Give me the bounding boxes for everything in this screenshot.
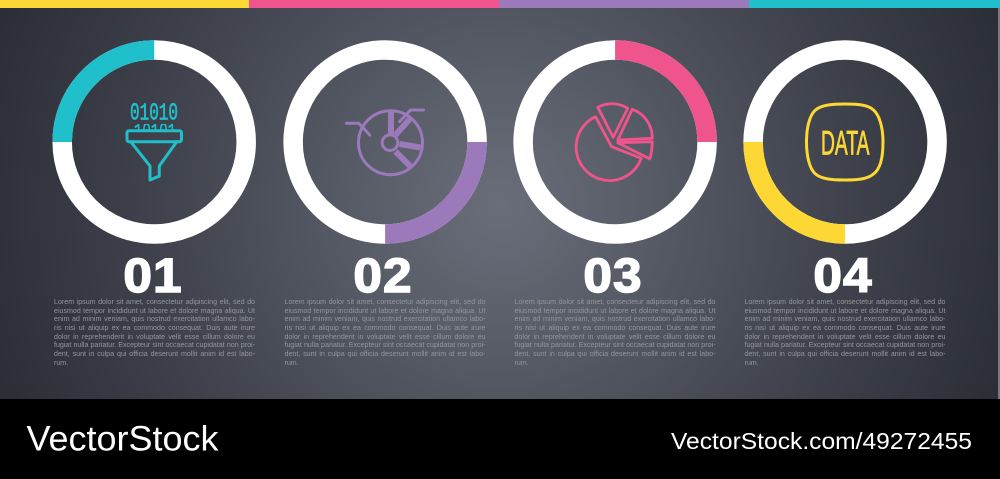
text block 04: rum. <box>744 359 759 367</box>
icon: binary data funnel <box>127 100 182 180</box>
ring: 03 progress <box>523 50 707 234</box>
text block 02: enim ad minim veniam, quis nostrud exercitation ullamco labo- <box>284 315 486 323</box>
text block 02: Lorem ipsum dolor sit amet, consectetur adipiscing elit, sed do <box>284 298 486 306</box>
text block 04: enim ad minim veniam, quis nostrud exercitation ullamco labo- <box>744 315 946 323</box>
text block 04: eiusmod tempor incididunt ut labore et dolore magna aliqua. Ut <box>744 307 946 315</box>
panel: step 04 <box>743 40 947 367</box>
text block 03 <box>514 298 716 367</box>
number 03: 03 <box>583 249 643 303</box>
ring: 04 progress <box>753 50 937 234</box>
footer band <box>0 399 1000 479</box>
icon: data badge: DATA <box>820 124 869 162</box>
icon: exploded pie chart <box>576 104 652 181</box>
text block 01: eiusmod tempor incididunt ut labore et dolore magna aliqua. Ut <box>54 307 255 315</box>
ring: 01 progress <box>62 50 246 234</box>
panel: step 01 <box>52 40 256 367</box>
text block 02: dent, sunt in culpa qui officia deserunt mollit anim id est labo- <box>284 350 486 358</box>
text block 03: ris nisi ut aliquip ex ea commodo consequat. Duis aute irure <box>514 324 716 332</box>
text block 02 <box>284 298 486 367</box>
text block 01 <box>54 298 255 367</box>
text block 01: enim ad minim veniam, quis nostrud exercitation ullamco labo- <box>54 315 255 323</box>
text block 03: Lorem ipsum dolor sit amet, consectetur adipiscing elit, sed do <box>514 298 716 306</box>
icon: data badge <box>806 104 882 180</box>
text block 01: Lorem ipsum dolor sit amet, consectetur adipiscing elit, sed do <box>54 298 255 306</box>
icon: disc with handles <box>346 110 423 175</box>
text block 02: ris nisi ut aliquip ex ea commodo consequat. Duis aute irure <box>284 324 486 332</box>
panel: step 02 <box>283 40 487 367</box>
text block 02: rum. <box>284 359 299 367</box>
text block 01: dent, sunt in culpa qui officia deserunt mollit anim id est labo- <box>54 350 255 358</box>
text block 03: dolor in reprehenderit in voluptate velit esse cillum dolore eu <box>514 333 716 341</box>
icon: binary data funnel: 10101 <box>134 120 176 147</box>
text block 03: fugiat nulla pariatur. Excepteur sint occaecat cupidatat non proi- <box>514 341 716 349</box>
panel: step 03 <box>513 40 717 367</box>
number 04: 04 <box>813 249 873 303</box>
text block 04: dent, sunt in culpa qui officia deserunt mollit anim id est labo- <box>744 350 946 358</box>
ring: 02 progress <box>293 50 477 234</box>
number 02: 02 <box>353 249 413 303</box>
text block 03: eiusmod tempor incididunt ut labore et dolore magna aliqua. Ut <box>514 307 716 315</box>
text block 04: ris nisi ut aliquip ex ea commodo consequat. Duis aute irure <box>744 324 946 332</box>
text block 04: fugiat nulla pariatur. Excepteur sint occaecat cupidatat non proi- <box>744 341 946 349</box>
footer image id: VectorStock.com/49272455 <box>671 428 972 454</box>
text block 01: ris nisi ut aliquip ex ea commodo consequat. Duis aute irure <box>54 324 255 332</box>
text block 04: Lorem ipsum dolor sit amet, consectetur adipiscing elit, sed do <box>744 298 946 306</box>
text block 01: dolor in reprehenderit in voluptate velit esse cillum dolore eu <box>54 333 255 341</box>
text block 02: dolor in reprehenderit in voluptate velit esse cillum dolore eu <box>284 333 486 341</box>
text block 01: fugiat nulla pariatur. Excepteur sint occaecat cupidatat non proi- <box>54 341 255 349</box>
text block 04 <box>744 298 946 367</box>
text block 03: enim ad minim veniam, quis nostrud exercitation ullamco labo- <box>514 315 716 323</box>
top colour bar <box>0 0 1000 8</box>
icon: binary data funnel: 01010 <box>130 100 178 127</box>
text block 02: fugiat nulla pariatur. Excepteur sint occaecat cupidatat non proi- <box>284 341 486 349</box>
text block 01: rum. <box>54 359 68 367</box>
text block 02: eiusmod tempor incididunt ut labore et dolore magna aliqua. Ut <box>284 307 486 315</box>
text block 03: dent, sunt in culpa qui officia deserunt mollit anim id est labo- <box>514 350 716 358</box>
footer logo: VectorStock <box>26 420 219 458</box>
text block 04: dolor in reprehenderit in voluptate velit esse cillum dolore eu <box>744 333 946 341</box>
number 01: 01 <box>123 249 182 303</box>
text block 03: rum. <box>514 359 529 367</box>
